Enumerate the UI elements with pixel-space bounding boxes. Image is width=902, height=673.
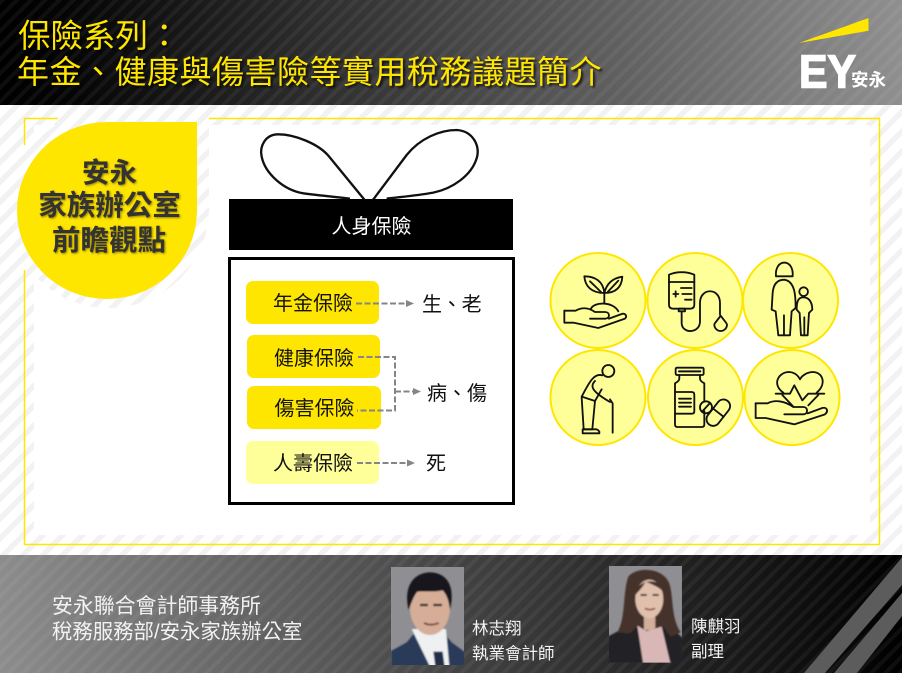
icon: elderly person with cane: [550, 350, 646, 445]
icon: IV drip: [648, 253, 742, 348]
icon: gift bow: [261, 130, 478, 200]
pill: accident insurance: [247, 386, 381, 429]
EY logo: [799, 18, 886, 98]
arrow: pension to birth and aging: [356, 300, 414, 307]
icon: mother and child: [743, 253, 838, 348]
yellow frame: [24, 118, 880, 544]
caption: Lin: 林志翔: [472, 619, 522, 638]
pill: life insurance: 人壽保險: [273, 452, 353, 475]
title: [17, 18, 602, 90]
title: 保險系列：: [18, 18, 181, 54]
label: birth and aging: 生、老: [422, 293, 481, 316]
badge: family office perspective: 前瞻觀點: [52, 225, 166, 257]
label: death: 死: [426, 453, 446, 475]
caption: Chen: [691, 617, 740, 661]
icon: medicine bottle and pills: [648, 350, 743, 445]
label: illness and injury: 病、傷: [427, 382, 487, 405]
pill: pension insurance: 年金保險: [273, 292, 353, 315]
pill: accident insurance: 傷害保險: [274, 397, 354, 420]
EY logo: EY: [799, 46, 856, 98]
organisation text: 稅務服務部/安永家族辦公室: [52, 620, 302, 644]
gift lid: personal insurance: [229, 199, 513, 250]
pill: pension insurance: [246, 281, 379, 324]
gift box panel: [230, 258, 514, 504]
icon: plant in hand: [550, 253, 646, 348]
arrow: health and accident to illness and injury: [357, 357, 421, 410]
gift lid: personal insurance: 人身保險: [332, 215, 412, 238]
pill: health insurance: [247, 335, 380, 378]
caption: Lin: [472, 619, 554, 663]
title: 年金、健康與傷害險等實用稅務議題簡介: [17, 54, 602, 90]
page background: [0, 105, 902, 555]
portrait: Lin: [391, 567, 465, 667]
caption: Chen: 陳麒羽: [691, 617, 740, 636]
header band: [0, 0, 902, 105]
footer band: [0, 555, 902, 673]
arrow: life to death: [357, 460, 415, 466]
pill: life insurance: [246, 441, 379, 484]
caption: Chen: 副理: [691, 642, 724, 661]
portrait: Chen: [608, 566, 683, 664]
badge: family office perspective: 家族辦公室: [38, 190, 181, 222]
badge: family office perspective: 安永: [82, 157, 137, 188]
icon grid: [550, 253, 840, 445]
icon: heart in hand: [744, 350, 840, 445]
badge: family office perspective: [17, 122, 197, 299]
organisation text: [52, 595, 302, 644]
pill: health insurance: 健康保險: [274, 347, 354, 370]
EY logo: 安永: [851, 70, 886, 90]
organisation text: 安永聯合會計師事務所: [52, 595, 261, 618]
caption: Lin: 執業會計師: [472, 644, 554, 663]
